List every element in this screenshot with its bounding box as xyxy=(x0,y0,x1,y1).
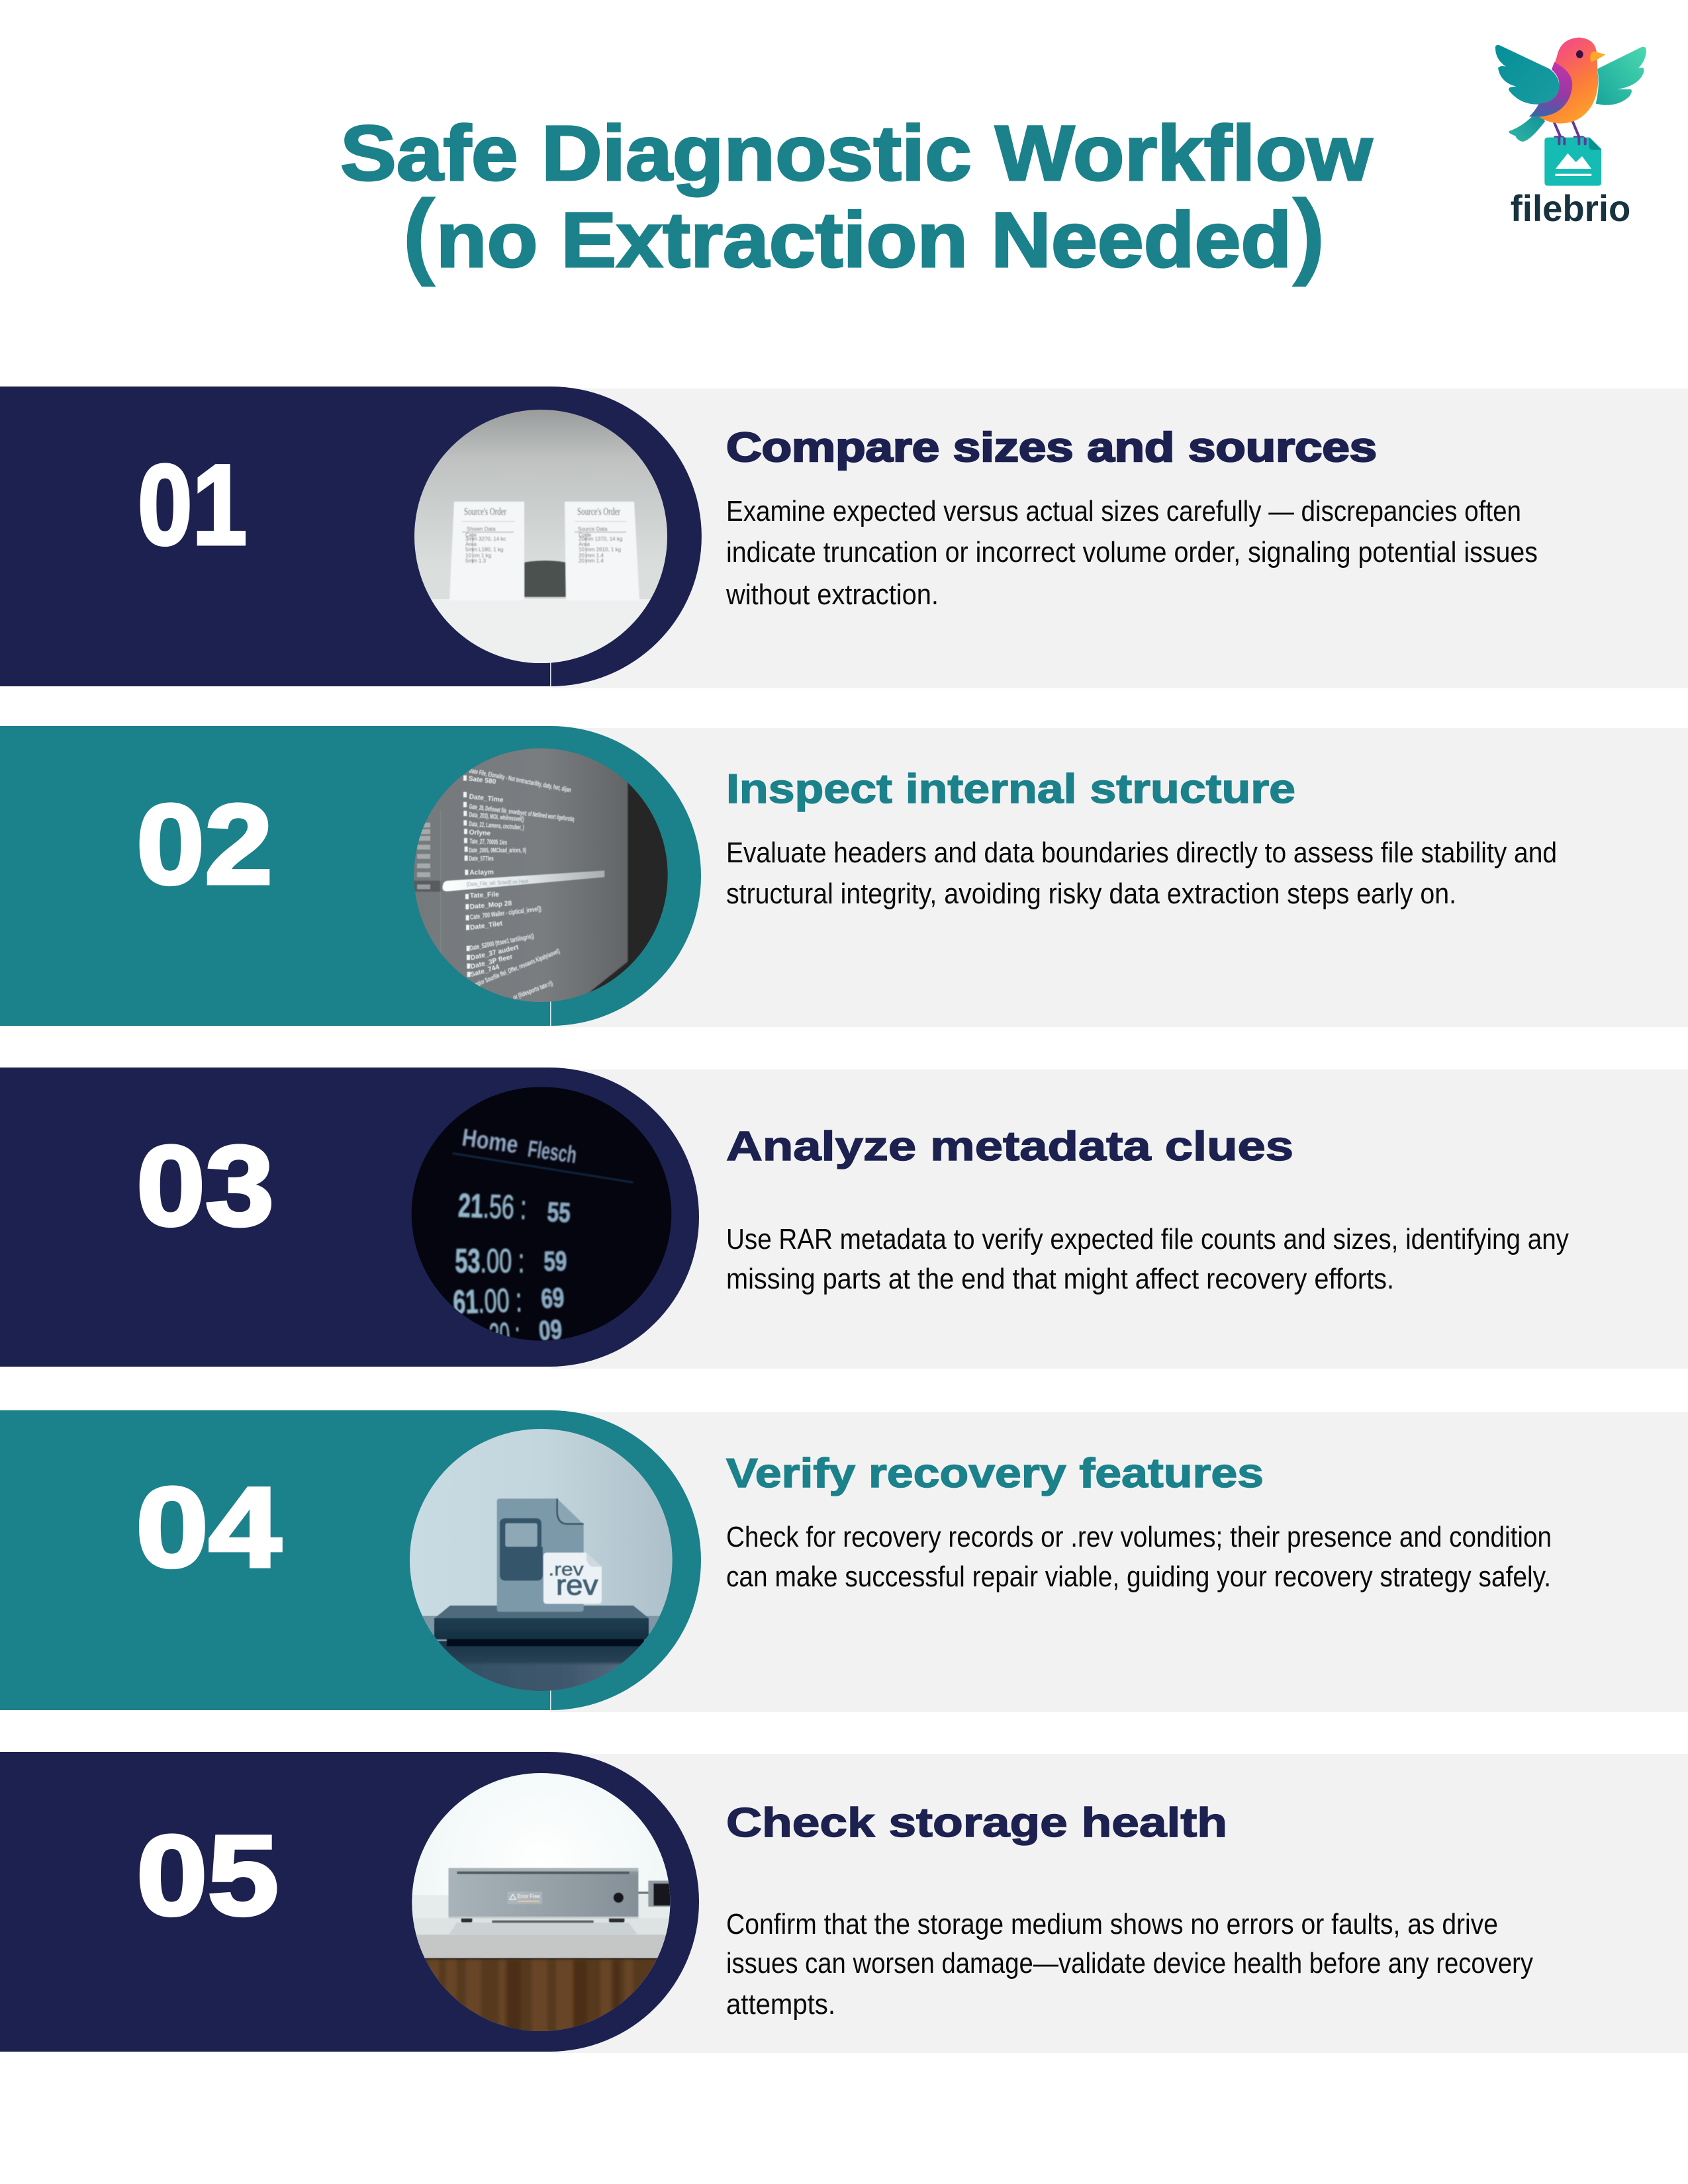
photo: file listing on a monitor: Date_5TTles xyxy=(469,856,494,863)
step 5 heading: Check storage health xyxy=(726,1800,1227,1846)
step 3 description xyxy=(726,1223,1569,1295)
photo: padlocked file with .rev card xyxy=(408,1428,675,1694)
step 4 heading: Verify recovery features xyxy=(726,1451,1264,1496)
step 5 description: attempts. xyxy=(726,1988,835,2021)
step 2 number: 02 xyxy=(136,781,273,908)
photo: file listing on a monitor: Jerglor Sourfile ffel_Offer, resoavrs Kipaly/aovel) xyxy=(470,948,561,990)
photo: blurred metadata display: Home xyxy=(461,1123,520,1158)
step 1 description xyxy=(726,495,1538,611)
step 4 number: 04 xyxy=(136,1464,281,1591)
photo: storage device on a counter xyxy=(410,1772,673,2034)
photo: file listing on a monitor xyxy=(412,747,672,1005)
photo: padlocked file with .rev card: .rev xyxy=(548,1559,584,1580)
panel: step 2 teal tab xyxy=(0,726,701,1026)
panel: step 5 navy tab xyxy=(0,1752,699,2052)
photo: two source order sheets: 20 mm 1.4 xyxy=(579,553,604,559)
photo: file listing on a monitor: Tate_File xyxy=(470,891,499,900)
step 1 description: without extraction. xyxy=(726,578,939,611)
step 3 number: 03 xyxy=(136,1122,274,1250)
step 4 description: Check for recovery records or .rev volumes; their presence and condition xyxy=(726,1521,1552,1553)
photo: two source order sheets: Cate xyxy=(465,532,477,538)
photo: file listing on a monitor: Date_37 audert xyxy=(470,944,520,962)
panel: step 1 navy tab xyxy=(0,387,702,686)
photo: file listing on a monitor: Data_22, Lamens, cnctruber, ) xyxy=(469,821,524,832)
title xyxy=(340,110,1373,287)
photo: two source order sheets: Source's Order xyxy=(577,506,620,518)
photo: file listing on a monitor: Cate_700 Waller - ciptical_irevel]) xyxy=(470,905,542,921)
photo: blurred metadata display: 53.00 : xyxy=(455,1242,524,1280)
panel: step 5 background xyxy=(551,1754,1688,2053)
photo: file listing on a monitor: Tate_27, 70005 1les xyxy=(469,838,507,846)
photo: file listing on a monitor: Date File, Elonality - Not tentractarility, daty, hot, dijan xyxy=(469,767,572,794)
photo: file listing on a monitor: Date_S2000 (ttsee1 tartiilsgris)) xyxy=(469,933,535,952)
photo: file listing on a monitor: Data_203), MOL whilressvel() xyxy=(469,811,524,823)
photo: two source order sheets: 3mm 3270, 14 kc xyxy=(465,536,506,542)
step 5 row xyxy=(0,1752,1688,2053)
photo: file listing on a monitor: Date_Time xyxy=(469,794,504,804)
step 1 description: Examine expected versus actual sizes carefully — discrepancies often xyxy=(726,495,1521,527)
step 1 number: 01 xyxy=(138,441,247,569)
step 2 description: structural integrity, avoiding risky data extraction steps early on. xyxy=(726,878,1456,910)
step 3 heading: Analyze metadata clues xyxy=(726,1124,1293,1169)
step 1 tab seam xyxy=(550,662,551,686)
photo: file listing on a monitor: Aclaym xyxy=(469,869,494,877)
photo: blurred metadata display: 55 xyxy=(547,1196,571,1228)
photo: blurred metadata display: Flesch xyxy=(526,1135,579,1169)
step 4 tab seam xyxy=(550,1689,551,1710)
panel: step 3 navy tab xyxy=(0,1068,699,1367)
photo: two source order sheets: Code xyxy=(579,532,592,538)
photo: two source order sheets: Source Data xyxy=(578,526,608,532)
icon: right wing xyxy=(1596,47,1646,105)
photo: blurred metadata display: 61.00 : xyxy=(452,1281,522,1321)
photo: two source order sheets: Area xyxy=(579,541,590,547)
photo: two source order sheets: 20mm 1370, 14 kg xyxy=(579,536,622,542)
icon: wing shoulder xyxy=(1529,62,1572,117)
icon: bird legs xyxy=(1554,121,1585,144)
step 1 row xyxy=(0,387,1688,688)
legs over file xyxy=(1559,138,1585,144)
photo: two source order sheets: 10 cm 1 kg xyxy=(465,553,491,559)
body text xyxy=(726,425,1538,611)
step 1 description: indicate truncation or incorrect volume order, signaling potential issues xyxy=(726,536,1538,569)
icon: left wing xyxy=(1495,45,1560,105)
step 5 number: 05 xyxy=(136,1812,279,1939)
photo: two source order sheets: Shown Data xyxy=(467,526,496,532)
step 2 row xyxy=(0,726,1688,1027)
photo: two source order sheets: 20 mm 1.4 xyxy=(579,558,604,564)
panel: step 4 background xyxy=(551,1412,1688,1712)
panel: step 4 teal tab xyxy=(0,1410,701,1710)
photo: file listing on a monitor: Sate 580 xyxy=(468,775,496,786)
photo: two source order sheets: 5mm L180, 1 kg xyxy=(465,547,503,553)
photo: blurred metadata display: 20 : xyxy=(489,1315,521,1354)
icon: eye xyxy=(1576,50,1583,58)
panel: step 3 background xyxy=(551,1069,1688,1369)
photo: blurred metadata display xyxy=(410,1085,673,1354)
photo: file listing on a monitor: Sate_744 xyxy=(469,964,500,979)
icon: image file xyxy=(1544,138,1601,186)
photo: blurred metadata display: 59 xyxy=(543,1245,567,1277)
step 4 row xyxy=(0,1410,1688,1712)
logo wordmark: filebrio xyxy=(1511,187,1630,229)
photo: file listing on a monitor: or (fidesports tate:r)) xyxy=(512,979,554,1001)
step 2 heading: Inspect internal structure xyxy=(726,766,1295,812)
step 3 description: missing parts at the end that might affect recovery efforts. xyxy=(726,1263,1394,1295)
logo: filebrio bird xyxy=(1495,38,1646,229)
step 2 description xyxy=(726,837,1557,910)
photo: file listing on a monitor: Date_Mop 28 xyxy=(469,900,512,911)
photo: file listing on a monitor: [Data_File_wil: Scted]l on Hant xyxy=(467,878,529,887)
step 1 heading: Compare sizes and sources xyxy=(726,425,1377,471)
photo: two source order sheets: 10 mm 2610, 1 kg xyxy=(579,547,621,553)
photo: file listing on a monitor: Date_Tilet xyxy=(470,920,503,932)
photo: blurred metadata display: 21.56 : xyxy=(457,1186,528,1226)
step 2 tab seam xyxy=(550,999,551,1026)
photo: file listing on a monitor: Date_2005, 0MCload_arices, 0) xyxy=(469,847,526,854)
photo: blurred metadata display: 09 xyxy=(538,1314,563,1346)
photo: two source order sheets: 5mm 1.3 xyxy=(465,558,487,564)
icon: bird tail xyxy=(1509,110,1545,142)
step 4 description: can make successful repair viable, guiding your recovery strategy safely. xyxy=(726,1561,1551,1593)
photo: two source order sheets xyxy=(410,407,672,666)
photo: two source order sheets: Area xyxy=(465,541,477,547)
step 3 row xyxy=(0,1068,1688,1369)
photo: two source order sheets: Source's Order xyxy=(464,506,506,518)
photo: file listing on a monitor: Date_3P fleer xyxy=(470,953,514,971)
icon: bird body xyxy=(1529,38,1598,124)
step 3 description: Use RAR metadata to verify expected file counts and sizes, identifying any xyxy=(726,1223,1569,1255)
panel: step 1 background xyxy=(551,388,1688,688)
title: (no Extraction Needed ) xyxy=(402,179,1326,287)
photo: file listing on a monitor: Gate_28, Defiswet file_snoetbyot: of Netlined wort ilgeforstiq xyxy=(469,803,575,823)
icon: beak xyxy=(1590,52,1605,62)
photo: padlocked file with .rev card: rev xyxy=(556,1569,598,1601)
step 4 description xyxy=(726,1521,1552,1593)
photo: file listing on a monitor: Orlyne xyxy=(469,829,491,837)
step 5 description: Confirm that the storage medium shows no errors or faults, as drive xyxy=(726,1908,1498,1940)
step 5 description xyxy=(726,1908,1533,2021)
photo: blurred metadata display: 69 xyxy=(540,1281,565,1314)
photo: storage device on a counter: Error Free xyxy=(518,1893,540,1899)
panel: step 2 background xyxy=(551,728,1688,1027)
step 5 description: issues can worsen damage—validate device health before any recovery xyxy=(726,1947,1533,1979)
step 2 description: Evaluate headers and data boundaries directly to assess file stability and xyxy=(726,837,1557,869)
title: Safe Diagnostic Workflow xyxy=(340,110,1373,197)
